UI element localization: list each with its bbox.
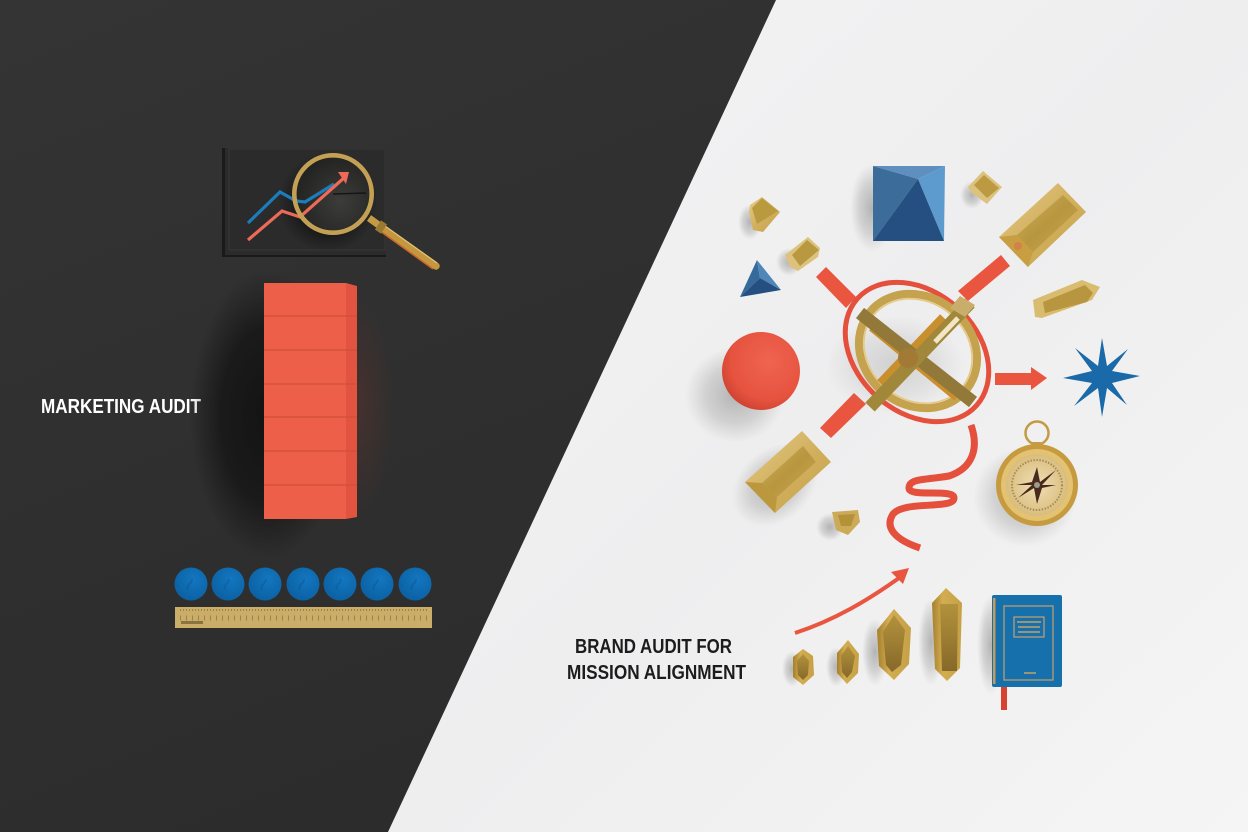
icon: gold nugget top left [738,197,780,240]
tower seams [264,316,357,485]
gold ring [836,270,1000,432]
icon: gold nugget mid [776,237,820,276]
label: brand audit for mission alignment: BRAND AUDIT FOR [575,636,732,658]
row of blue coins [174,568,432,600]
gold front bands [860,313,973,402]
magnifier handle [369,218,437,269]
icon: gold bar bottom left [715,426,835,544]
panel: light diagonal background [388,0,1248,832]
ribbon [1001,686,1007,710]
label: brand audit for mission alignment [567,636,746,684]
book shadow [977,595,1005,695]
crystal 4 [918,588,962,686]
label: marketing audit: MARKETING AUDIT [41,396,201,418]
label: brand audit for mission alignment: MISSION ALIGNMENT [567,662,746,684]
tower side [346,283,357,519]
magnifier lens ring [294,155,372,233]
crystal 1 [782,649,814,687]
gold ruler [175,607,432,628]
icon: coral ball [685,332,800,443]
icon: compass [973,422,1078,547]
gold ring inner edge [843,277,993,425]
band highlight [935,318,958,342]
coral block tower [190,270,394,560]
band end block [950,296,975,317]
tower front [264,283,346,519]
icon: red bar connectors [816,255,1010,438]
chart card [222,148,386,257]
book cover [992,595,1062,687]
icon: gold nugget lower [816,510,860,541]
icon: blue star [1063,338,1140,417]
outer red ring [817,254,1017,450]
icon: gold nugget top right [960,171,1002,209]
crystal 2 [826,640,859,687]
icon: blue pyramid [850,164,945,252]
gold crystals row [782,588,962,687]
rising red arrow [795,568,909,633]
tower shadow [190,270,346,560]
centre hub [898,348,918,368]
magnifying glass over growth chart [222,148,437,269]
inner gold back bands [872,327,957,397]
magnifier drop shadow [278,152,378,252]
lens inner mark [333,193,366,194]
icon: blue small pyramid [740,260,781,297]
red chart arrow [248,172,349,240]
icon: gold crystal right [1033,280,1100,318]
blue book [977,595,1062,710]
blue chart line [248,184,334,223]
wavy red line [890,425,974,548]
magnifier lens interior [295,156,371,232]
arrow: red to star [995,367,1047,390]
tower reflected glow [322,295,394,515]
crystal 3 [862,609,911,686]
icon: armillary sphere [817,254,1017,450]
icon: gold bar top right [999,183,1086,267]
